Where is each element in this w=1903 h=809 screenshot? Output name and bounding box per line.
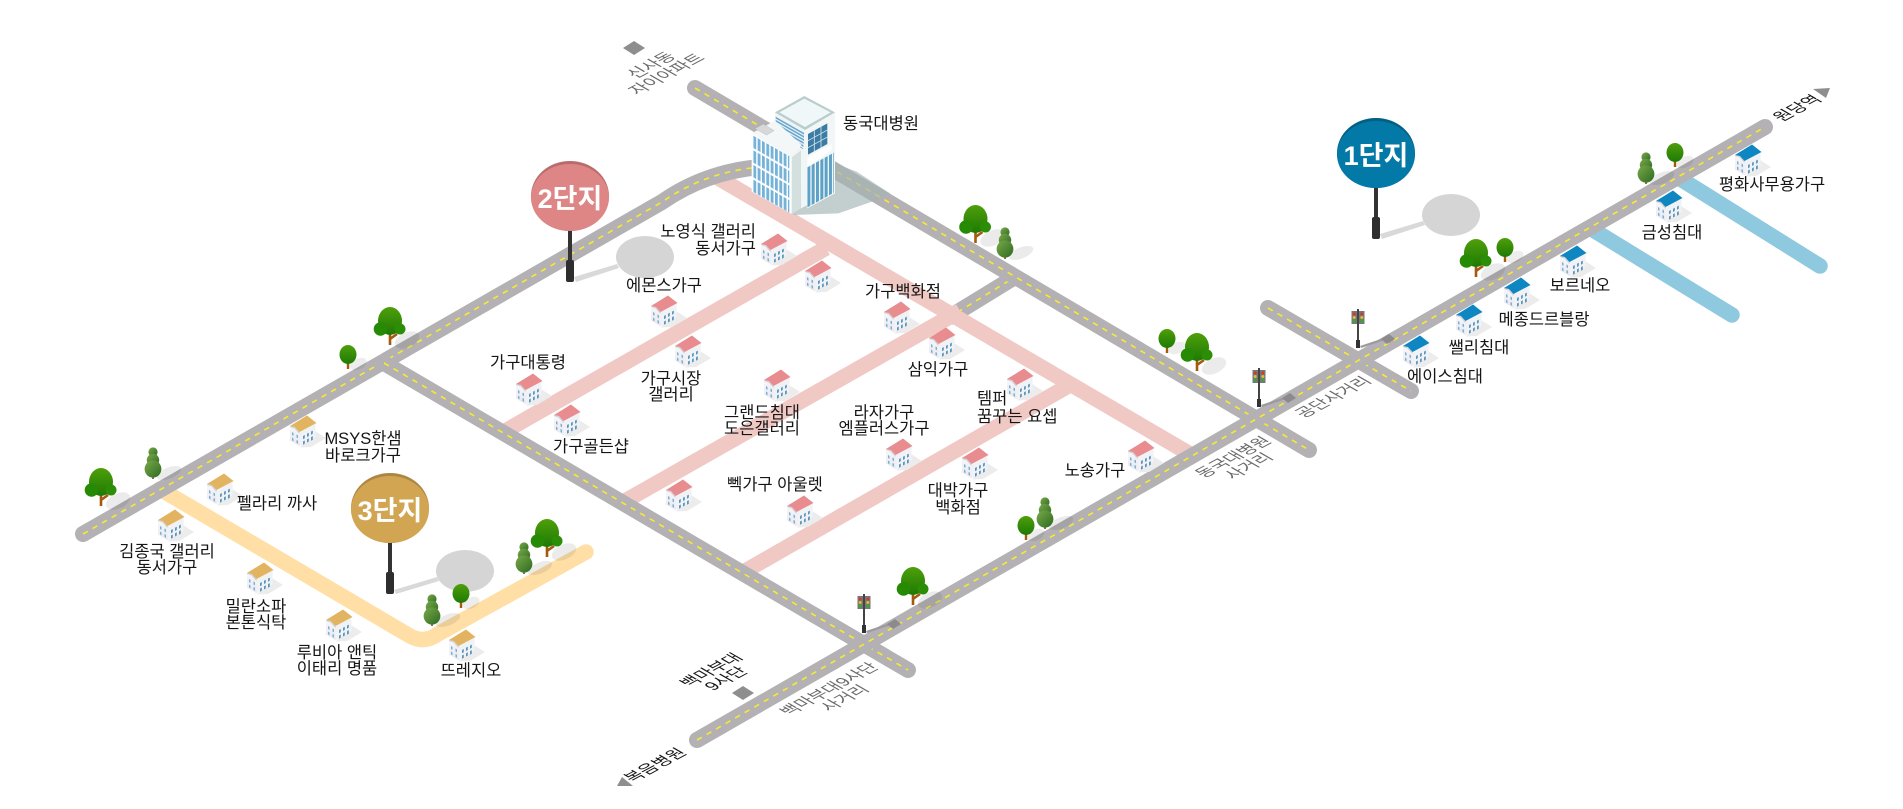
labels: complex 3 shops: 이태리 명품 <box>297 659 377 678</box>
labels: complex 2 shops: 동국대병원 <box>843 114 919 133</box>
isometric label: Sinsa-dong apartment: 신사동 <box>623 49 680 81</box>
labels: complex 2 shops: 에몬스가구 <box>626 276 702 295</box>
labels: complex 1 shops: 금성침대 <box>1642 223 1702 242</box>
labels: complex 1 shops: 쌜리침대 <box>1449 338 1509 357</box>
labels: complex 1 shops: 보르네오 <box>1550 276 1610 295</box>
road: top diagonal past hospital <box>695 88 1309 450</box>
road: lower diagonal <box>384 363 908 670</box>
labels: complex 1 shops: 평화사무용가구 <box>1719 175 1825 194</box>
road: long main road to Wondang <box>697 127 1765 740</box>
labels: complex 2 shops: 가구시장 <box>641 369 701 388</box>
sign: complex 3 <box>351 473 494 594</box>
labels: complex 2 shops: 갤러리 <box>648 385 694 404</box>
blue roads: complex 1 <box>1590 178 1820 315</box>
road: branch connector <box>948 277 1015 318</box>
isometric label: Baekma division intersection: 사거리 <box>816 682 874 714</box>
labels: complex 3 shops: 김종국 갤러리 <box>119 542 215 561</box>
labels: complex 3 shops: 바로크가구 <box>325 446 401 465</box>
labels: complex 2 shops: 뻭가구 아울렛 <box>727 475 823 494</box>
labels: complex 2 shops: 노영식 갤러리 <box>660 222 756 241</box>
sign: complex 2 <box>531 161 674 282</box>
labels: complex 2 shops: 엠플러스가구 <box>838 419 930 438</box>
pink roads: complex 2 <box>500 176 1195 574</box>
labels: complex 1 shops: 에이스침대 <box>1407 367 1483 386</box>
labels: complex 2 shops: 도은갤러리 <box>724 419 800 438</box>
sign: complex 2: 2단지 <box>538 184 602 214</box>
labels: complex 2 shops: 가구골든샵 <box>553 437 629 456</box>
buildings: pink complex 2 <box>516 234 1164 528</box>
labels: complex 2 shops: 꿈꾸는 요셉 <box>977 407 1057 426</box>
isometric label: Baekma 9th division: 9사단 <box>700 664 753 693</box>
hospital building <box>752 96 890 215</box>
sign: complex 1: 1단지 <box>1344 141 1408 171</box>
labels: complex 2 shops: 동서가구 <box>695 239 756 258</box>
labels: complex 3 shops: 동서가구 <box>137 558 197 577</box>
labels: complex 2 shops: 삼익가구 <box>908 360 968 379</box>
labels: complex 2 shops <box>490 114 1125 517</box>
sign: complex 1 <box>1337 118 1480 239</box>
arrow: toward Wondang station <box>1813 88 1830 98</box>
isometric label: Sinsa-dong apartment: 자이아파트 <box>624 51 710 97</box>
sign: complex 3: 3단지 <box>358 496 422 526</box>
road: left main road to hospital <box>83 167 760 534</box>
isometric label: Baekma division intersection: 백마부대9사단 <box>776 660 883 718</box>
road: right crossing road <box>1268 308 1411 391</box>
labels: complex 2 shops: 라자가구 <box>854 403 914 422</box>
labels: complex 3 shops: MSYS한샘 <box>324 429 402 448</box>
yellow road: complex 3 <box>160 489 586 640</box>
isometric label: Bokeum hospital: 복음병원 <box>620 746 691 785</box>
labels: complex 3 shops: 루비아 앤틱 <box>297 643 377 662</box>
landmark marker: Sinsa-dong apartment <box>623 41 645 55</box>
isometric label: Dongguk hospital intersection: 사거리 <box>1220 450 1278 482</box>
labels: complex 2 shops: 템퍼 <box>977 389 1007 408</box>
labels: complex 2 shops: 노송가구 <box>1065 461 1125 480</box>
buildings: blue complex 1 <box>1403 144 1771 368</box>
labels: complex 1 shops <box>1407 175 1825 386</box>
labels: complex 3 shops: 밀란소파 <box>226 597 286 616</box>
arrow: toward Bokeum hospital <box>617 777 633 786</box>
landmark marker: Baekma division <box>732 686 754 700</box>
isometric label: Wondang station: 원당역 <box>1769 92 1826 124</box>
labels: complex 2 shops: 대박가구 <box>928 481 988 500</box>
trees <box>85 143 1695 630</box>
labels: complex 1 shops: 메종드르블랑 <box>1498 310 1590 329</box>
isometric label: Gongdan intersection: 공단사거리 <box>1291 374 1376 420</box>
labels: complex 3 shops: 펠라리 까사 <box>237 494 317 513</box>
labels: complex 3 shops: 뜨레지오 <box>441 661 501 680</box>
buildings: yellow complex 3 <box>158 416 485 662</box>
labels: complex 3 shops <box>119 429 501 680</box>
labels: complex 3 shops: 본톤식탁 <box>226 613 286 632</box>
labels: complex 2 shops: 가구대통령 <box>490 353 566 372</box>
labels: complex 2 shops: 백화점 <box>935 498 981 517</box>
isometric label: Baekma 9th division: 백마부대 <box>676 651 747 690</box>
labels: complex 2 shops: 가구백화점 <box>865 282 941 301</box>
isometric label: Dongguk hospital intersection: 동국대병원 <box>1191 434 1276 480</box>
labels: complex 2 shops: 그랜드침대 <box>724 403 800 422</box>
traffic lights <box>858 309 1395 633</box>
